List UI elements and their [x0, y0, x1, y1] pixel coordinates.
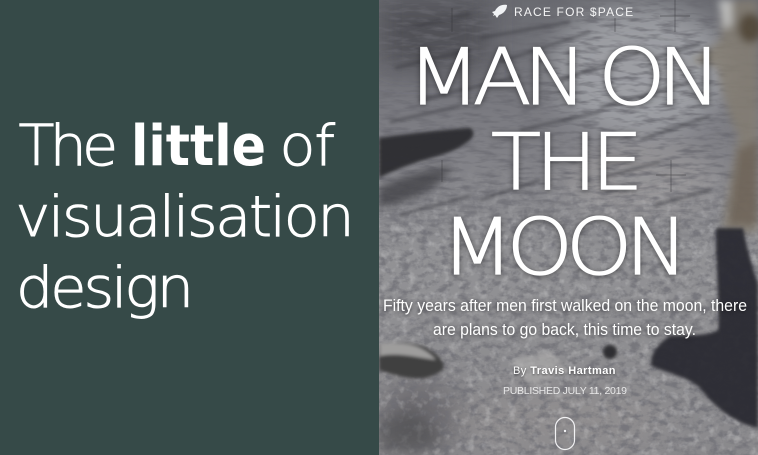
astronaut: [690, 0, 758, 233]
astronaut shadow: [651, 228, 758, 428]
photo base tone: [379, 0, 758, 455]
subtitle: [383, 296, 747, 339]
ground texture: [379, 0, 758, 455]
title line 2: THE: [491, 117, 643, 208]
byline: By Travis Hartman: [513, 365, 616, 377]
main title: man on the moon: [407, 33, 722, 293]
panel: left title background: [0, 0, 379, 455]
eyebrow: race for space: [492, 5, 635, 19]
lower slope shade: [379, 166, 452, 208]
publish date: PUBLISHED JULY 11, 2019: [503, 385, 627, 397]
panel: moon surface photo: [379, 0, 758, 455]
title line 3: MOON: [441, 203, 688, 293]
title line 1: MAN ON: [407, 33, 722, 123]
subtitle line 2: are plans to go back, this time to stay.: [433, 320, 696, 339]
heading line 2: visualisation: [16, 184, 355, 250]
slope streaks: [390, 14, 710, 215]
heading line 1: The: [18, 113, 118, 179]
icon: scroll indicator: [556, 418, 574, 450]
fiducial crosshairs: [442, 0, 690, 192]
heading line 1: [18, 113, 336, 179]
heading line 1: of: [280, 113, 336, 179]
icon: rocket: [492, 5, 507, 18]
footprint patches: [379, 345, 617, 452]
dark crater slope: [379, 128, 473, 178]
eyebrow text: RACE FOR $PACE: [514, 5, 635, 19]
heading line 3: design: [16, 255, 194, 321]
heading line 1: little: [131, 114, 266, 179]
sunlit haze: [379, 0, 730, 450]
heading: The little of visualisation design: [16, 113, 355, 321]
boulder: [379, 343, 444, 378]
